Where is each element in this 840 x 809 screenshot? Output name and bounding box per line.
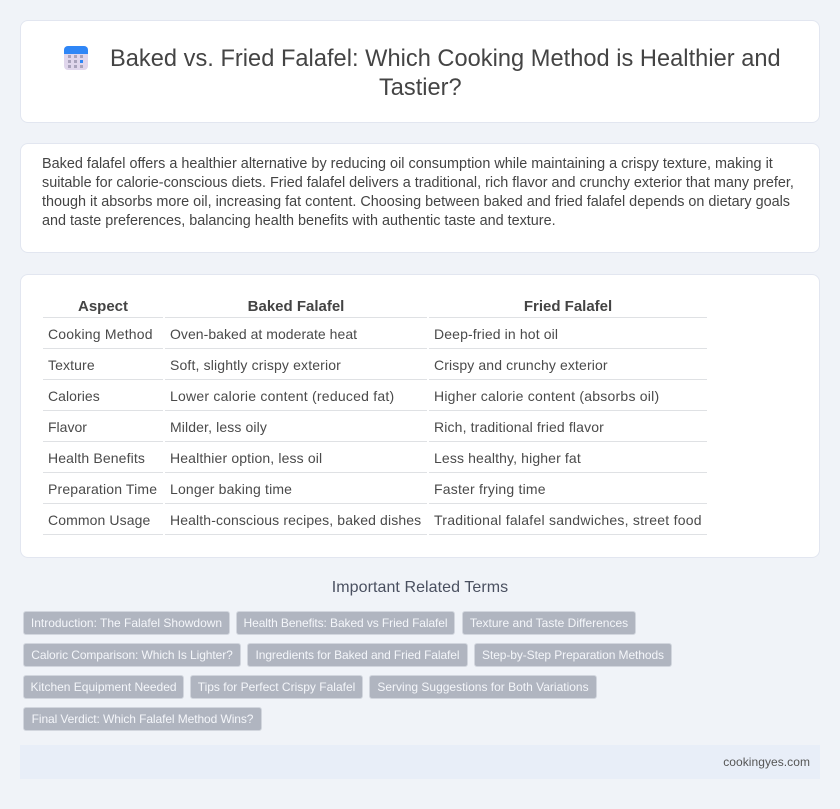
row: flavor: Milder, less oily	[170, 419, 267, 435]
row: cooking method: Oven-baked at moderate heat	[170, 326, 357, 342]
row: calories: Higher calorie content (absorbs oil)	[434, 388, 659, 404]
footer source: cookingyes.com	[723, 755, 810, 769]
row: cooking method: Deep-fried in hot oil	[434, 326, 558, 342]
row: common usage	[48, 512, 702, 528]
panel: comparison table	[20, 274, 820, 558]
table header	[78, 298, 612, 315]
row: texture: Texture	[48, 357, 95, 373]
row: health benefits: Less healthy, higher fat	[434, 450, 581, 466]
tag: Kitchen Equipment Needed	[30, 680, 177, 694]
row: calories	[48, 388, 659, 404]
row: texture: Soft, slightly crispy exterior	[170, 357, 341, 373]
description text: Baked falafel offers a healthier alternative by reducing oil consumption while maintaining a crispy texture, making it	[42, 156, 773, 172]
tag	[462, 611, 636, 635]
title: Tastier?	[379, 75, 462, 101]
row: preparation time: Faster frying time	[434, 481, 546, 497]
row: health benefits: Healthier option, less oil	[170, 450, 322, 466]
description text: and taste preferences, balancing health benefits with authentic taste and texture.	[42, 213, 556, 229]
table header: Baked Falafel	[248, 298, 344, 315]
row: flavor: Flavor	[48, 419, 87, 435]
tag: Final Verdict: Which Falafel Method Wins?	[32, 712, 253, 726]
row: health benefits	[48, 450, 581, 466]
row: texture: Crispy and crunchy exterior	[434, 357, 608, 373]
row: common usage: Common Usage	[48, 512, 150, 528]
panel: header	[20, 20, 820, 123]
tag: Ingredients for Baked and Fried Falafel	[256, 648, 459, 662]
tag: Introduction: The Falafel Showdown	[31, 616, 222, 630]
description text	[42, 156, 794, 229]
tag: Health Benefits: Baked vs Fried Falafel	[244, 616, 447, 630]
row: texture	[48, 357, 608, 373]
tag	[247, 643, 468, 667]
tag	[236, 611, 455, 635]
title: Baked vs. Fried Falafel: Which Cooking Method is Healthier and	[110, 46, 781, 72]
row: cooking method	[48, 326, 558, 342]
tag: Tips for Perfect Crispy Falafel	[198, 680, 355, 694]
tag: Serving Suggestions for Both Variations	[377, 680, 589, 694]
row: flavor: Rich, traditional fried flavor	[434, 419, 604, 435]
description text: though it absorbs more oil, increasing fat content. Choosing between baked and fried falafel depends on dietary goals	[42, 194, 790, 210]
row: cooking method: Cooking Method	[48, 326, 153, 342]
tag: Caloric Comparison: Which Is Lighter?	[31, 648, 233, 662]
related term tags	[23, 611, 672, 731]
table header: Aspect	[78, 298, 128, 315]
tag	[369, 675, 597, 699]
panel: description	[20, 143, 820, 253]
table header: Fried Falafel	[524, 298, 612, 315]
row: preparation time: Preparation Time	[48, 481, 157, 497]
row: common usage: Traditional falafel sandwiches, street food	[434, 512, 702, 528]
tag: Texture and Taste Differences	[470, 616, 628, 630]
heading: related terms: Important Related Terms	[332, 579, 508, 596]
row: flavor	[48, 419, 604, 435]
footer	[20, 745, 820, 779]
comparison table	[43, 298, 707, 535]
row: calories: Calories	[48, 388, 100, 404]
row: preparation time: Longer baking time	[170, 481, 292, 497]
row: calories: Lower calorie content (reduced fat)	[170, 388, 394, 404]
tag	[23, 675, 184, 699]
tag	[23, 611, 230, 635]
row: common usage: Health-conscious recipes, baked dishes	[170, 512, 421, 528]
row: preparation time	[48, 481, 546, 497]
tag	[23, 643, 241, 667]
tag	[190, 675, 363, 699]
tag	[474, 643, 672, 667]
title	[110, 46, 781, 101]
tag: Step-by-Step Preparation Methods	[482, 648, 664, 662]
row: health benefits: Health Benefits	[48, 450, 145, 466]
icon: calendar	[64, 46, 88, 70]
description text: suitable for calorie-conscious diets. Fried falafel delivers a traditional, rich flavor and crunchy exterior that many prefer,	[42, 175, 794, 191]
tag	[23, 707, 262, 731]
